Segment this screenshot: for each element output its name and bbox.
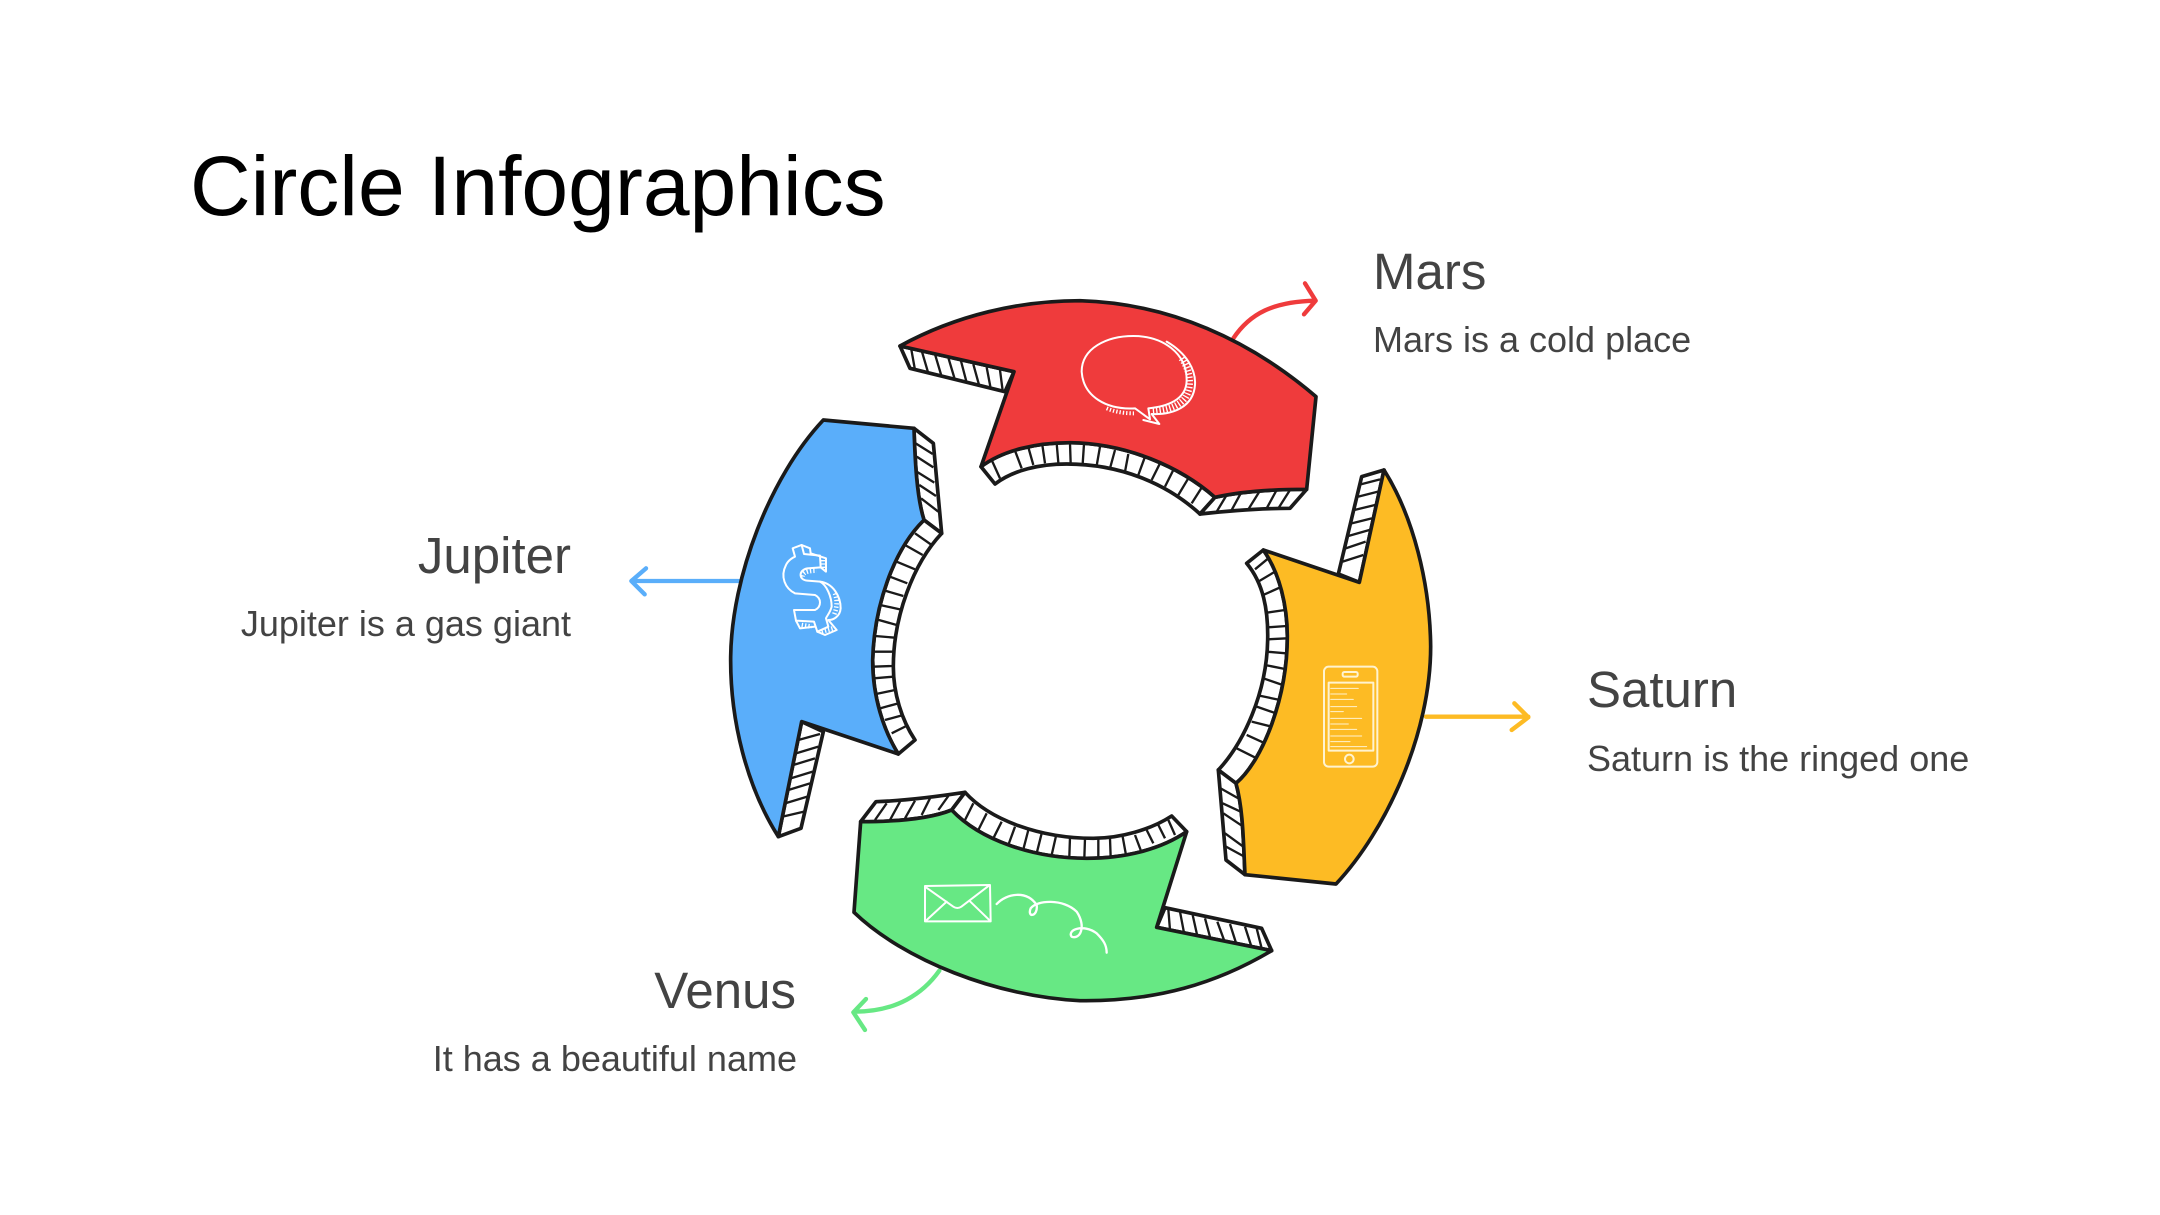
panel: Jupiter segment <box>631 420 942 837</box>
panel: Mars segment <box>900 283 1316 514</box>
label: Saturn: Saturn <box>1587 661 1737 718</box>
hatched edges: Saturn <box>1218 470 1384 875</box>
hatched edges: Jupiter <box>778 428 942 837</box>
arrow: Saturn <box>1426 703 1528 730</box>
label: Mars <box>1373 243 1691 360</box>
label: Venus <box>433 962 797 1079</box>
label: Saturn <box>1587 661 1969 779</box>
arrow: Venus <box>853 971 939 1030</box>
icon: speech bubble <box>1082 336 1195 424</box>
label: Jupiter: Jupiter is a gas giant <box>241 603 571 644</box>
icon: envelope with swirl <box>925 885 1107 953</box>
panel: Venus segment <box>853 792 1272 1030</box>
label: Mars: Mars <box>1373 243 1486 300</box>
label: Jupiter <box>241 527 571 644</box>
label: Saturn: Saturn is the ringed one <box>1587 738 1969 779</box>
icon: phone <box>1324 667 1377 767</box>
label: Venus: Venus <box>654 962 796 1019</box>
hatched edges: Mars <box>900 346 1307 514</box>
label: Mars: Mars is a cold place <box>1373 319 1691 360</box>
face: Venus <box>854 810 1272 1001</box>
face: Mars <box>900 301 1316 497</box>
panel: Saturn segment <box>1218 470 1528 884</box>
arrow: Jupiter <box>631 568 738 594</box>
hatched edges: Venus <box>861 792 1272 951</box>
label: Jupiter: Jupiter <box>418 527 571 584</box>
icon: dollar sign <box>783 545 841 635</box>
face: Saturn <box>1236 470 1431 884</box>
title: Circle Infographics <box>190 139 886 233</box>
label: Venus: It has a beautiful name <box>433 1038 797 1079</box>
arrow: Mars <box>1233 283 1316 338</box>
face: Jupiter <box>731 420 924 837</box>
